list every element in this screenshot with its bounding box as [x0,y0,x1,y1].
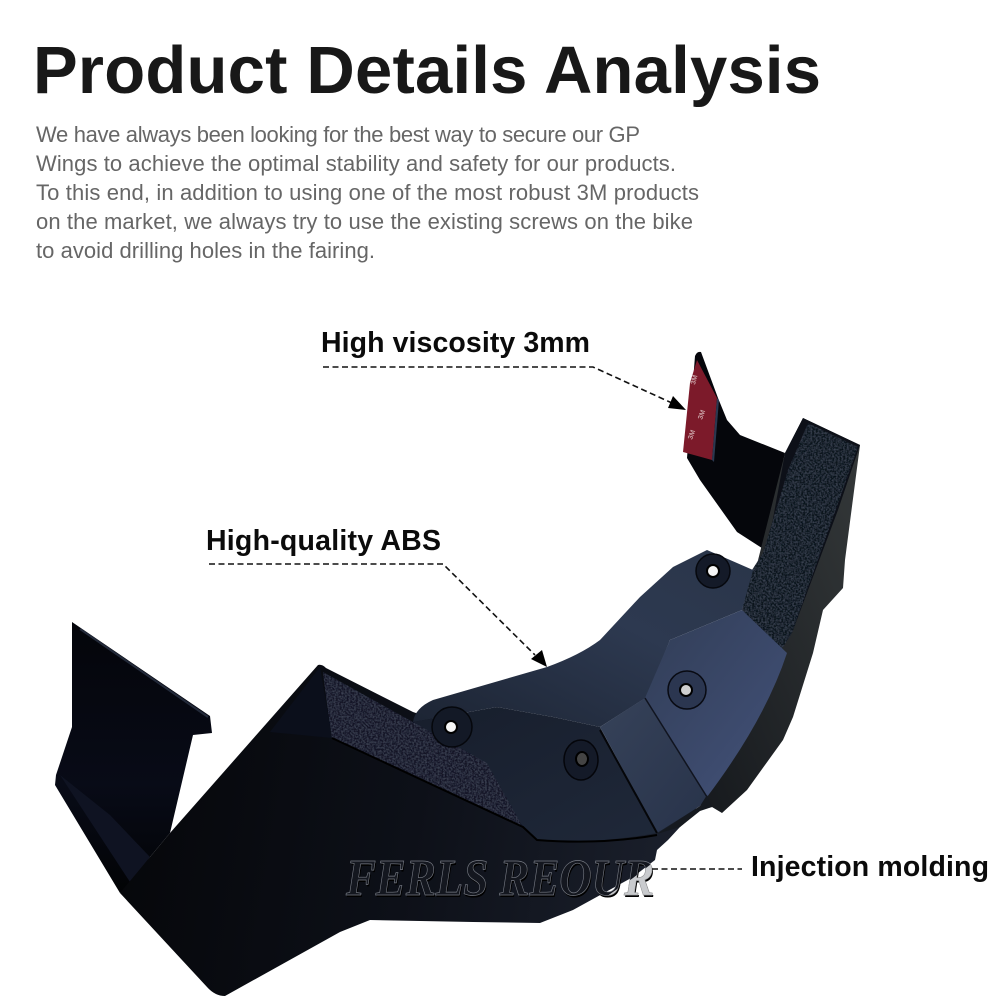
centre flap block [600,698,707,833]
intro text block: Wings to achieve the optimal stability and safety for our products. [36,151,676,176]
screw hole 2 [668,671,706,709]
intro text block: to avoid drilling holes in the fairing. [36,238,375,263]
watermark: FERLS REOUR [346,852,655,909]
left fin lower highlight [60,775,150,882]
product photo: GP wing [55,352,860,996]
callout: high-quality ABS [206,525,547,667]
screw hole 4 [432,707,472,747]
watermark [346,860,654,898]
left wing fin [55,622,212,893]
main black body [120,665,700,996]
right velcro panel [742,423,858,652]
callout: high viscosity 3mm: High viscosity 3mm [321,327,590,359]
red adhesive tape: 3M [697,409,707,421]
body seam [332,738,657,842]
right shell top dark edge [760,418,860,633]
callout: injection molding: Injection molding [751,851,989,883]
intro text block: on the market, we always try to use the existing screws on the bike [36,209,693,234]
body notch filler [657,795,712,834]
red adhesive tape [683,360,719,462]
callout: high viscosity 3mm [321,327,686,410]
intro text block: We have always been looking for the best way to secure our GP [36,122,640,147]
red adhesive tape: 3M [690,374,699,386]
centre mounting plate [413,550,787,841]
callout: high-quality ABS: High-quality ABS [206,525,441,557]
screw hole 3 [564,740,598,780]
arrow head [531,650,547,667]
watermark: FERLS REOUR [345,850,654,907]
right wing fin [687,352,785,550]
left fin upper edge [80,629,208,717]
arrow head [668,396,686,410]
intro text block: To this end, in addition to using one of the most robust 3M products [36,180,699,205]
red adhesive tape: 3M [687,429,697,441]
screw hole 1 [696,554,730,588]
title: Product Details Analysis [33,33,821,108]
left velcro panel [323,672,523,827]
body upper facet [270,667,332,738]
right wing outer shell [700,418,860,813]
intro text block [36,122,699,263]
watermark: FERLS REOUR [345,850,654,907]
